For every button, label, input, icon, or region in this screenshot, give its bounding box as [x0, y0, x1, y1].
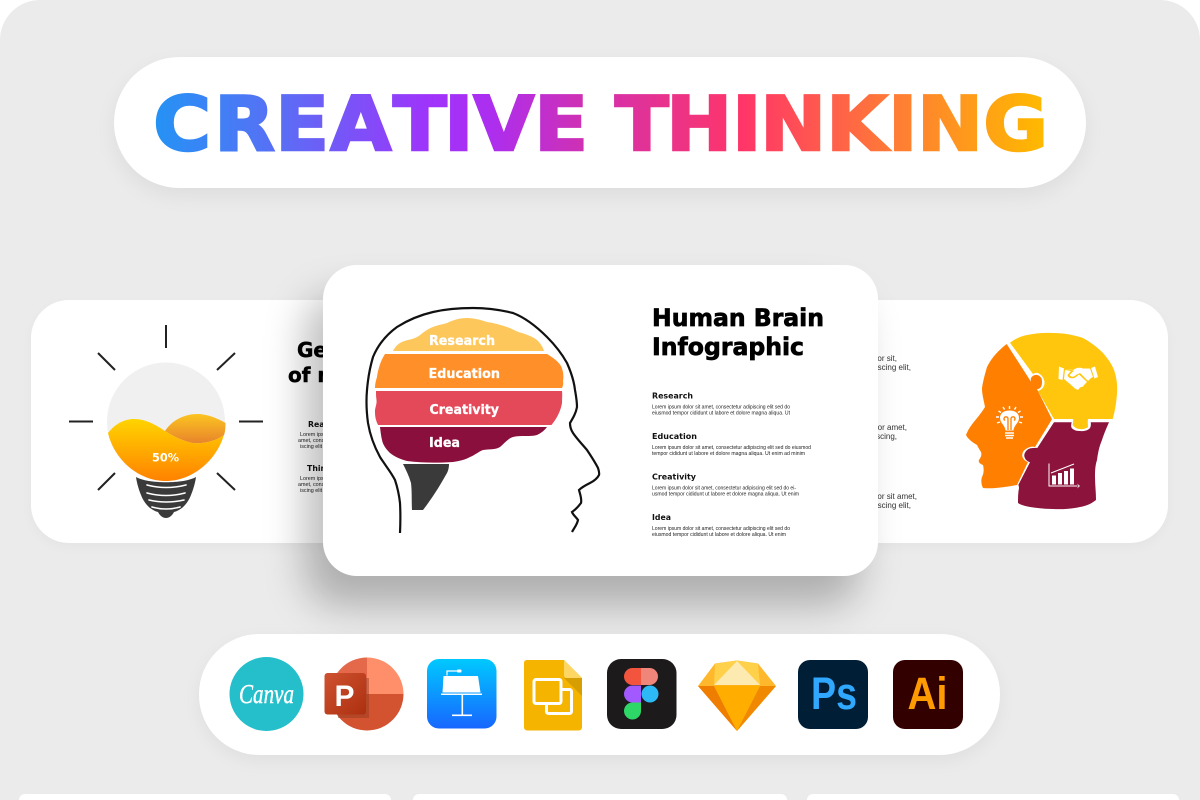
puzzle head: orange piece — [966, 344, 1052, 488]
left slide text block: thinking: iscing elit sed do — [300, 488, 340, 494]
left slide text block: reason: iscing elit sed do — [300, 444, 340, 450]
slide heading: Infographic — [652, 333, 804, 361]
text block: research: Research — [652, 390, 693, 400]
left slide text block: reason — [298, 420, 345, 450]
icon: light bulb rays — [69, 325, 263, 490]
text block: research — [652, 390, 790, 416]
brain labels — [428, 334, 500, 451]
panel: software icons pill — [199, 634, 1000, 755]
text block: education: tempor cididunt ut labore et dolore magna aliqua. Ut enim ad minim — [652, 451, 805, 457]
panel: right puzzle head slide — [800, 300, 1168, 543]
icon: Google Slides — [524, 660, 582, 730]
left slide heading: Generation — [297, 338, 423, 362]
text block: education: Education — [652, 431, 697, 441]
bulb percentage: 50% — [152, 450, 179, 464]
text block: education: Lorem ipsum dolor sit amet, consectetur adipiscing elit sed do eiusmod — [652, 445, 811, 451]
title text: CREATIVE THINKING — [153, 82, 1048, 169]
slide heading: Human Brain — [652, 304, 824, 332]
left slide text block: reason: Lorem ipsum dolor — [300, 432, 345, 438]
panel: central human brain slide — [323, 265, 878, 576]
text block: creativity: usmod tempor cididunt ut labore et dolore magna aliqua. Ut enim — [652, 492, 799, 498]
icon: PowerPoint: P — [334, 680, 355, 713]
text block: idea: eiusmod tempor cididunt ut labore et dolore aliqua. Ut enim — [652, 532, 786, 538]
left slide text block: reason: amet, consectetur — [298, 438, 341, 444]
text block: creativity: Creativity — [652, 472, 697, 482]
brain labels: Research — [429, 334, 495, 349]
icon: growth chart — [1048, 464, 1080, 488]
text block: idea — [652, 512, 790, 538]
text block: creativity: Lorem ipsum dolor sit amet, consectetur adipiscing elit sed do ei- — [652, 486, 796, 492]
left slide text block: thinking: amet, consectetur — [298, 482, 341, 488]
brain layer: research — [393, 318, 544, 351]
right slide text: Lorem ipsum dolor sit, — [818, 354, 897, 363]
right slide text: consectetur adipiscing elit, — [817, 501, 911, 510]
left slide text block: thinking: Lorem ipsum dolor — [300, 476, 345, 482]
bulb socket — [136, 477, 196, 518]
panel: bottom card middle — [413, 794, 787, 800]
icon: Photoshop — [798, 660, 868, 729]
icon: Canva: Canva — [239, 679, 294, 709]
right slide text: consectetur adipiscing elit, — [817, 363, 911, 372]
brain layer: education — [375, 354, 563, 388]
brain layer: idea — [380, 427, 547, 463]
brain layer: creativity — [375, 391, 562, 425]
right slide text: Lorem ipsum dolor sit amet, — [818, 492, 917, 501]
text block: education — [652, 431, 811, 457]
panel: left light bulb slide — [31, 300, 431, 543]
icon: Sketch — [698, 660, 776, 731]
left slide text block: thinking — [298, 464, 345, 494]
icon: Photoshop: Ps — [811, 668, 857, 719]
icon: light bulb on head — [996, 406, 1023, 438]
left slide text block: thinking: Thinking — [307, 464, 345, 473]
brain labels: Idea — [429, 436, 460, 451]
head outline — [366, 308, 599, 533]
brain labels: Education — [428, 367, 500, 382]
right slide text: Lorem ipsum dolor amet, — [819, 423, 907, 432]
text block: research: eiusmod tempor cididunt ut labore et dolore magna aliqua. Ut — [652, 410, 790, 416]
icon: Canva — [230, 657, 304, 731]
text block: idea: Lorem ipsum dolor sit amet, consectetur adipiscing elit sed do — [652, 526, 790, 532]
panel: bottom card right — [807, 794, 1179, 800]
text block: idea: Idea — [652, 512, 671, 522]
left slide text block: reason: Reason — [308, 420, 340, 429]
text block: creativity — [652, 472, 799, 498]
icon: Illustrator: Ai — [908, 668, 948, 719]
right slide text: consectetur adipiscing, — [816, 432, 897, 441]
brain layer: cerebellum — [403, 464, 449, 510]
left slide heading: of new ideas — [288, 363, 431, 387]
puzzle head: maroon piece — [1018, 422, 1109, 509]
panel: bottom card left — [19, 794, 391, 800]
title pill — [114, 57, 1086, 188]
text block: research: Lorem ipsum dolor sit amet, consectetur adipiscing elit sed do — [652, 404, 790, 410]
icon: Illustrator — [893, 660, 963, 729]
right slide text — [816, 354, 917, 510]
brain labels: Creativity — [430, 403, 499, 418]
icon: handshake — [1058, 366, 1098, 390]
puzzle head: yellow piece — [1010, 333, 1117, 429]
icon: light bulb — [107, 362, 226, 518]
icon: PowerPoint — [324, 658, 404, 730]
icon: Keynote — [427, 659, 496, 728]
icon: Figma — [607, 659, 676, 729]
